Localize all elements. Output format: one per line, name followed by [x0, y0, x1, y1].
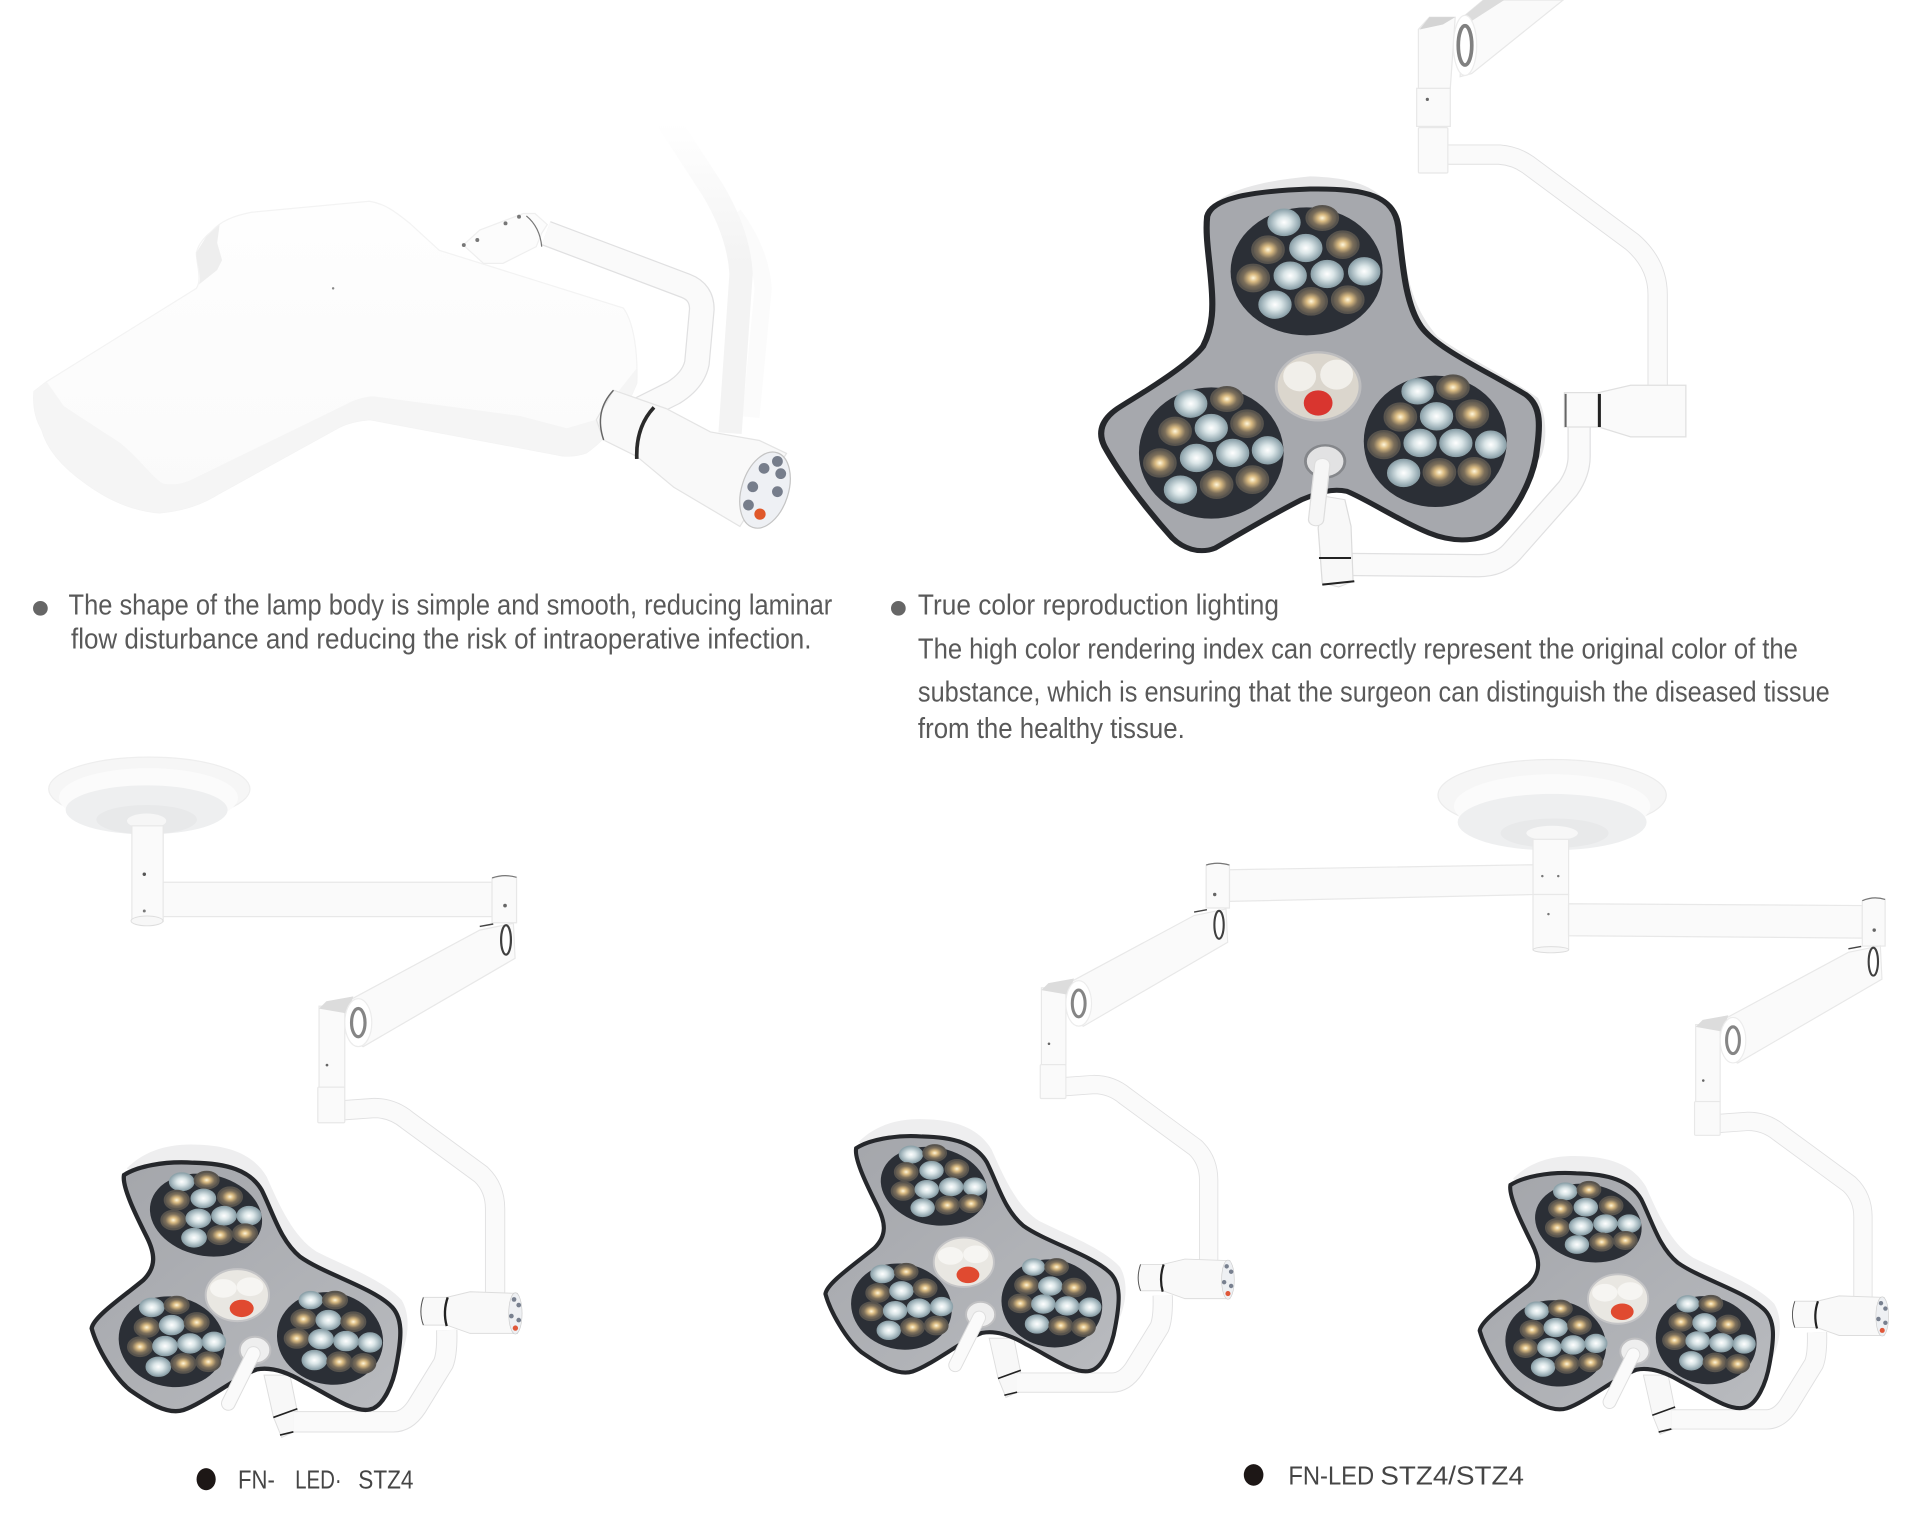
panel: single head ceiling lamp: [49, 757, 522, 1437]
pole shadow: [734, 215, 763, 417]
label: FN-LED-STZ4: [197, 1466, 413, 1494]
label: FN-LED STZ4/STZ4: [1244, 1463, 1524, 1491]
label: FN-LED-STZ4: STZ4: [358, 1466, 413, 1494]
text block: true color reproduction lighting: True color reproduction lighting: [918, 589, 1279, 621]
text block: true color reproduction lighting: The high color rendering index can correctly represent the original color of the: [918, 634, 1798, 666]
left horizontal arm: [1206, 863, 1533, 908]
label: FN-LED-STZ4: LED·: [295, 1466, 342, 1494]
panel: top-right lamp front view: [1101, 0, 1686, 587]
right lamp head: [1480, 946, 1889, 1434]
lamp shell: [34, 201, 637, 513]
panel: double head ceiling lamp: [825, 760, 1889, 1434]
upper joint: [332, 214, 547, 290]
upper arm: [1347, 0, 1658, 566]
ceiling post: [1533, 839, 1569, 953]
control head: [596, 390, 799, 535]
support pole: [663, 113, 741, 433]
text block: lamp body description: flow disturbance and reducing the risk of intraoperative infection.: [71, 624, 811, 656]
label: FN-LED STZ4/STZ4: STZ4/STZ4: [1380, 1463, 1524, 1491]
horizontal arm: [163, 876, 517, 923]
shell notch: [196, 225, 222, 285]
ceiling dome: [49, 757, 250, 834]
text block: true color reproduction lighting: [891, 589, 1830, 745]
text block: true color reproduction lighting: from the healthy tissue.: [918, 713, 1185, 745]
label: FN-LED STZ4/STZ4: FN-LED: [1288, 1463, 1374, 1491]
text block: lamp body description: The shape of the lamp body is simple and smooth, reducing laminar: [69, 589, 833, 621]
ceiling dome: [1438, 760, 1666, 850]
text block: lamp body description: [33, 589, 833, 656]
lamp head: [1101, 176, 1545, 587]
ceiling post: [131, 826, 163, 926]
right horizontal arm: [1569, 898, 1885, 946]
left lamp head: [825, 909, 1234, 1397]
control cylinder: [1564, 385, 1686, 437]
label: FN-LED-STZ4: FN-: [238, 1466, 275, 1494]
lamp shell front edge: [34, 368, 637, 513]
lamp head and spring arm: [92, 923, 522, 1437]
panel: top-left lamp body: [34, 113, 799, 535]
upper arm: [546, 233, 702, 410]
